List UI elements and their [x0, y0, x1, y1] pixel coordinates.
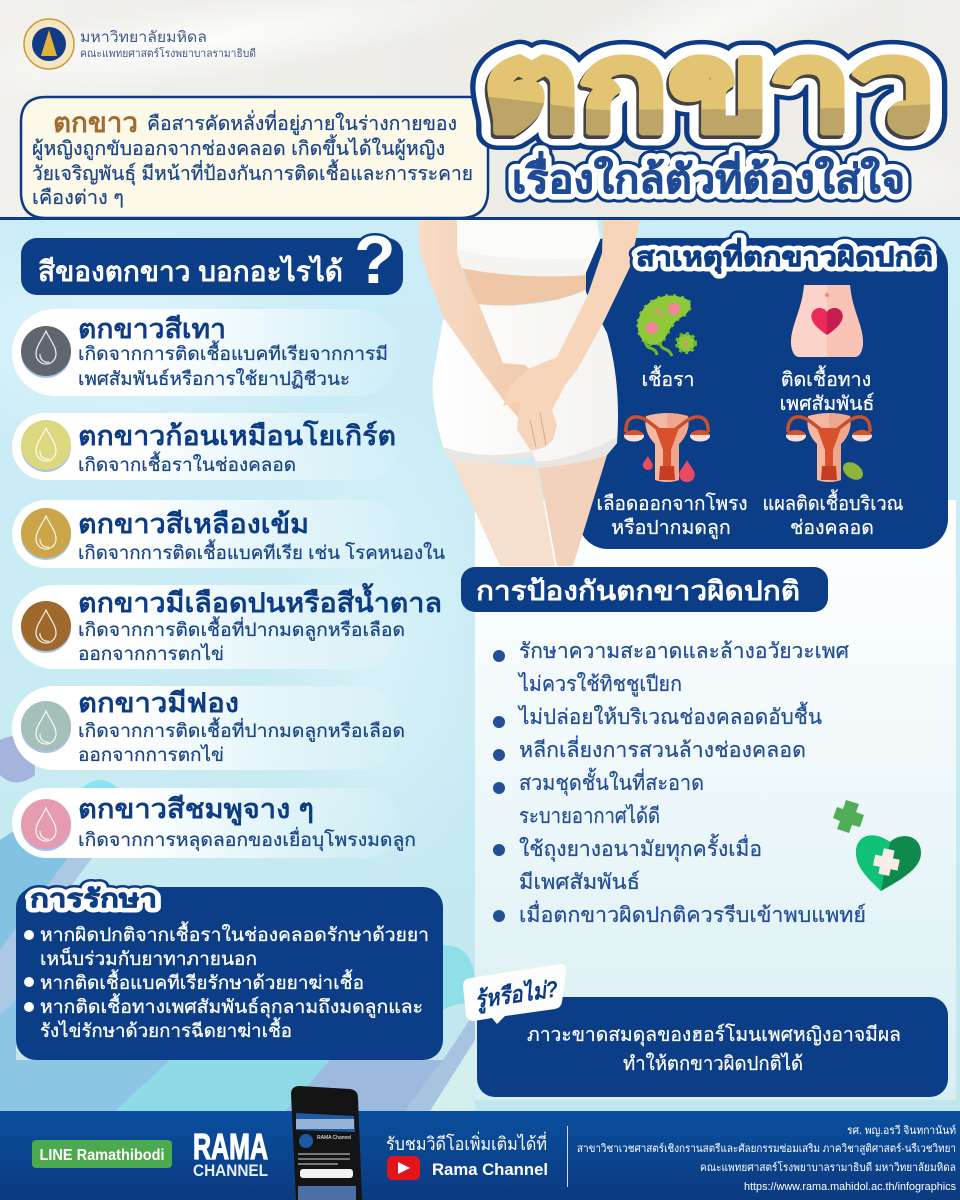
logo: Mahidol University: มหาวิทยาลัยมหิดล [80, 29, 207, 46]
panel: did you know: ทำให้ตกขาวผิดปกติได้ [623, 1052, 803, 1075]
list: prevention: ไม่ปล่อยให้บริเวณช่องคลอดอับชื้น [517, 702, 822, 729]
crop top [455, 220, 600, 276]
item: foam: เกิดจากการติดเชื้อที่ปากมดลูกหรือเลือด [78, 717, 405, 742]
swatch: grey [21, 326, 71, 378]
credits: https://www.rama.mahidol.ac.th/infographics [744, 1181, 956, 1193]
item: cottage: เกิดจากเชื้อราในช่องคลอด [78, 451, 296, 475]
label: infected wound [762, 489, 904, 539]
university seal [24, 19, 74, 69]
swatch: pink [21, 799, 71, 851]
icon: uterus bleeding [624, 413, 710, 482]
icon: YouTube [387, 1156, 420, 1180]
heading: colours [21, 222, 403, 298]
heading: causes: สาเหตุที่ตกขาวผิดปกติ [636, 237, 933, 274]
logo: Mahidol University: คณะแพทยศาสตร์โรงพยาบาลรามาธิบดี [80, 46, 256, 60]
button: LINE: LINE Ramathibodi [40, 1147, 164, 1164]
left arm [418, 220, 535, 420]
list: prevention: สวมชุดชั้นในที่สะอาด [519, 768, 704, 796]
subtitle: เรื่องใกล้ตัวที่ต้องใส่ใจ [512, 151, 905, 202]
panel: treatment: หากผิดปกติจากเชื้อราในช่องคลอดรักษาด้วยยา [40, 921, 429, 945]
text: watch more: รับชมวิดีโอเพิ่มเติมได้ที่ [386, 1131, 547, 1154]
item: pink [12, 788, 416, 858]
subtitle: เรื่องใกล้ตัวที่ต้องใส่ใจ [512, 151, 905, 202]
panel: treatment: หากติดเชื้อแบคทีเรียรักษาด้วยยาฆ่าเชื้อ [40, 969, 364, 993]
item: blood: ตกขาวมีเลือดปนหรือสีน้ำตาล [78, 582, 442, 618]
heading: treatment: การรักษา [30, 885, 157, 913]
panel: did you know [477, 997, 948, 1097]
title: ตกขาว [483, 18, 935, 157]
title [470, 40, 948, 151]
heading: causes: สาเหตุที่ตกขาวผิดปกติ [636, 237, 933, 274]
icon: green plus and heart [833, 800, 921, 891]
icon: uterus infection [786, 413, 872, 483]
item: dark yellow [12, 500, 445, 568]
item: pink: ตกขาวสีชมพูจาง ๆ [78, 794, 314, 826]
title: ตกขาว [483, 18, 935, 157]
intro text box: วัยเจริญพันธุ์ มีหน้าที่ป้องกันการติดเชื้อและการระคาย [32, 159, 473, 186]
callout: did you know bubble [463, 964, 566, 1024]
panel: treatment: รังไข่รักษาด้วยการฉีดยาฆ่าเชื้อ [40, 1017, 292, 1041]
item: foam [12, 686, 405, 770]
label: STI [780, 365, 874, 415]
button: LINE [32, 1140, 172, 1168]
heading: colours: ? [354, 222, 396, 298]
swatch: brown [21, 601, 71, 653]
swatch: pale yellow [21, 420, 71, 472]
right content panel [475, 500, 956, 1100]
title: ตกขาว [481, 21, 933, 160]
item: dark yellow: ตกขาวสีเหลืองเข้ม [78, 509, 309, 539]
item: foam: ตกขาวมีฟอง [78, 688, 239, 718]
heading: treatment: การรักษา [30, 885, 157, 913]
item: cottage: ตกขาวก้อนเหมือนโยเกิร์ต [78, 419, 396, 451]
callout: did you know bubble: รู้หรือไม่? [473, 975, 560, 1015]
panel: treatment: เหน็บร่วมกับยาทาภายนอก [40, 946, 257, 969]
heading: causes: สาเหตุที่ตกขาวผิดปกติ [636, 237, 933, 274]
item: pink: เกิดจากการหลุดลอกของเยื่อบุโพรงมดลูก [78, 827, 416, 852]
legs [452, 460, 555, 566]
item: cottage [12, 413, 400, 480]
heading: colours: สีของตกขาว บอกอะไรได้ [38, 255, 343, 287]
item: grey: เกิดจากการติดเชื้อแบคทีเรียจากการมี [78, 340, 388, 364]
text: Rama Channel: Rama Channel [432, 1160, 548, 1179]
item: blood: เกิดจากการติดเชื้อที่ปากมดลูกหรือเลือด [78, 616, 405, 641]
midriff [460, 262, 586, 310]
intro text box: คือสารคัดหลั่งที่อยู่ภายในร่างกายของ [147, 110, 457, 136]
intro text box: ผู้หญิงถูกขับออกจากช่องคลอด เกิดขึ้นได้ในผู้หญิง [32, 134, 445, 161]
list: prevention [493, 640, 866, 927]
item: dark yellow: เกิดจากการติดเชื้อแบคทีเรีย เช่น โรคหนองใน [78, 539, 445, 563]
panel: did you know: ภาวะขาดสมดุลของฮอร์โมนเพศหญิงอาจมีผล [527, 1023, 901, 1047]
label: STI: ติดเชื้อทาง [781, 365, 871, 391]
item: blood: ออกจากการตกไข่ [78, 643, 224, 664]
label: bleeding: หรือปากมดลูก [611, 517, 731, 540]
logo: Rama Channel: RAMA [193, 1126, 268, 1167]
item: grey [12, 309, 400, 396]
figure: woman in white [418, 220, 640, 566]
title: ตกขาว [483, 18, 935, 157]
label: infected wound: ช่องคลอด [790, 517, 874, 539]
item: blood [12, 582, 442, 669]
panel: causes background [578, 238, 948, 549]
right arm and hand [503, 220, 640, 451]
heading: prevention: การป้องกันตกขาวผิดปกติ [476, 576, 800, 606]
logo: Mahidol University [24, 19, 256, 69]
item: grey: เพศสัมพันธ์หรือการใช้ยาปฏิชีวนะ [78, 368, 350, 389]
title: ตกขาว [483, 18, 935, 157]
list: prevention: รักษาความสะอาดและล้างอวัยวะเพศ [519, 640, 850, 663]
label: bleeding [596, 492, 748, 540]
intro text box: ตกขาว [53, 107, 138, 138]
phone mockup [291, 1086, 362, 1200]
subtitle: เรื่องใกล้ตัวที่ต้องใส่ใจ [512, 151, 905, 202]
list: prevention: เมื่อตกขาวผิดปกติควรรีบเข้าพบแพทย์ [519, 900, 866, 927]
list: prevention: ใช้ถุงยางอนามัยทุกครั้งเมื่อ [519, 834, 762, 862]
panel: treatment [16, 885, 443, 1060]
heading: prevention [461, 567, 828, 612]
swatch: grey green [21, 701, 71, 753]
shorts [433, 290, 618, 468]
top cream band [0, 0, 960, 220]
icon: fungus [638, 296, 695, 356]
list: prevention: มีเพศสัมพันธ์ [519, 870, 640, 894]
phone mockup: RAMA Channel [317, 1135, 351, 1141]
credits [577, 1124, 956, 1193]
label: bleeding: เลือดออกจากโพรง [596, 492, 748, 515]
logo: Rama Channel: CHANNEL [193, 1161, 268, 1180]
label: STI: เพศสัมพันธ์ [780, 392, 874, 415]
intro text box [21, 97, 488, 218]
list: prevention: หลีกเลี่ยงการสวนล้างช่องคลอด [519, 735, 806, 762]
swatch: dark yellow [21, 508, 71, 560]
label: fungus: เชื้อรา [641, 365, 695, 391]
icon: intimate area with heart [791, 285, 863, 357]
panel: treatment: หากติดเชื้อทางเพศสัมพันธ์ลุกลามถึงมดลูกและ [40, 993, 423, 1019]
footer [0, 1086, 960, 1200]
heading: treatment: การรักษา [30, 885, 157, 913]
list: prevention: ไม่ควรใช้ทิชชูเปียก [517, 672, 682, 697]
intro text box: เคืองต่าง ๆ [32, 187, 124, 209]
label: infected wound: แผลติดเชื้อบริเวณ [762, 489, 904, 515]
item: grey: ตกขาวสีเทา [78, 314, 226, 344]
item: foam: ออกจากการตกไข่ [78, 744, 224, 765]
logo: Rama Channel [193, 1126, 268, 1180]
list: prevention: ระบายอากาศได้ดี [519, 804, 660, 828]
